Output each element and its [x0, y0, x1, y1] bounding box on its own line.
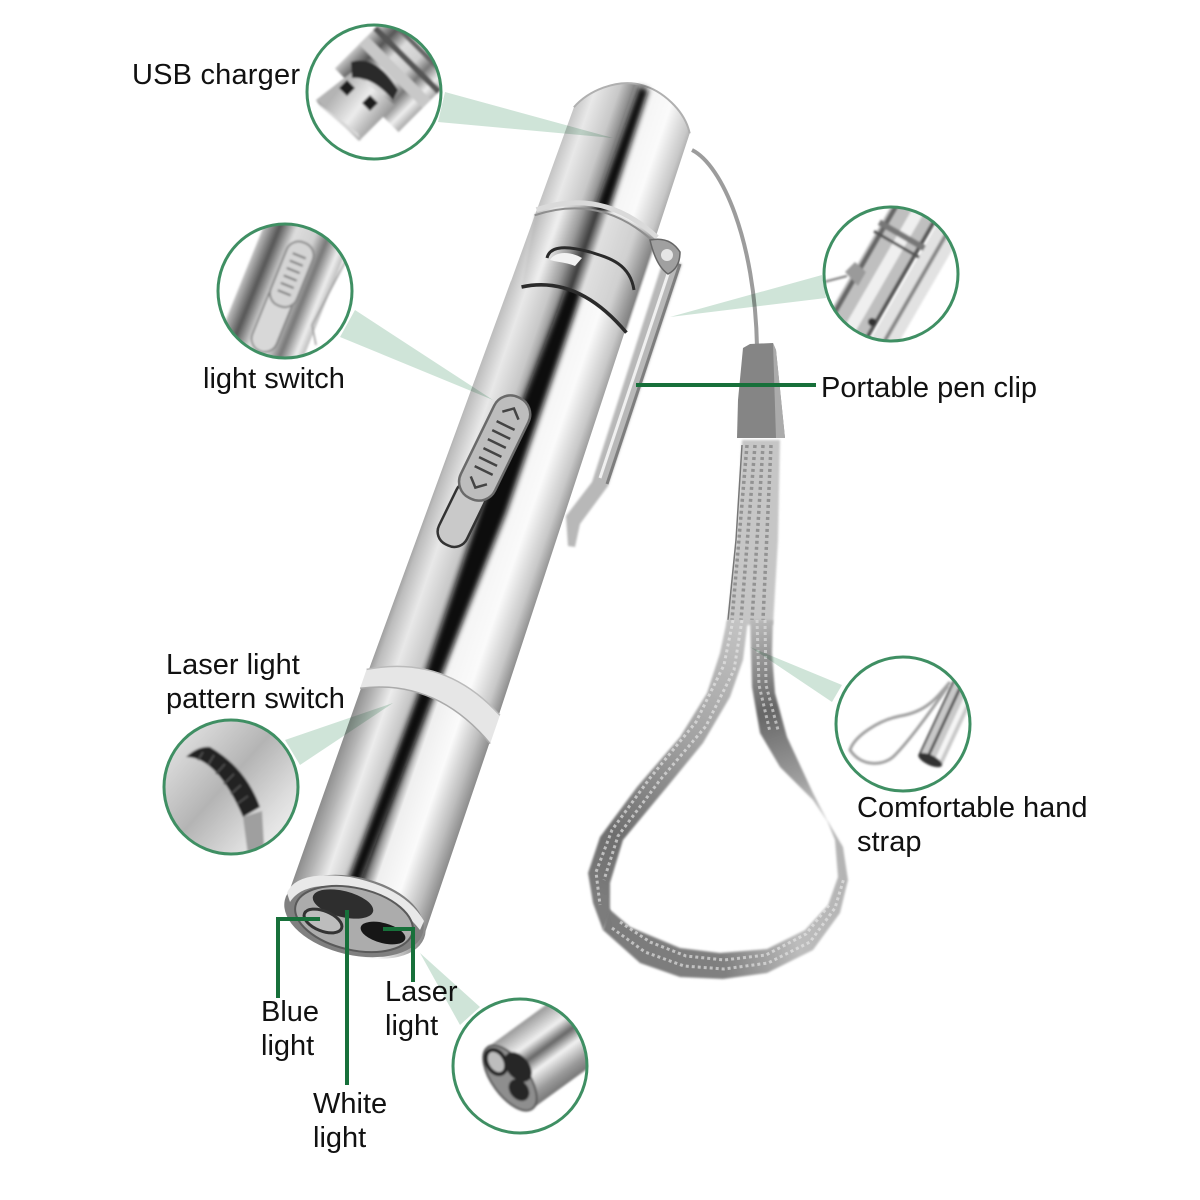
strap right strand	[750, 620, 843, 847]
line: pen clip	[636, 383, 816, 387]
magnified pen	[226, 226, 344, 356]
blue lens	[301, 904, 345, 938]
switch slider	[453, 389, 536, 507]
light switch	[430, 389, 536, 553]
line: laser light	[383, 929, 413, 982]
beam: pattern switch	[285, 703, 393, 765]
label: comfortable hand strap: strap	[857, 826, 921, 858]
magnified clip barrel	[833, 208, 932, 335]
label: USB charger: USB charger	[132, 59, 300, 91]
label: white light: light	[313, 1122, 366, 1154]
strap connector	[737, 343, 785, 438]
beam: lens	[420, 953, 480, 1025]
mini pen	[916, 680, 968, 769]
beam: light switch	[340, 310, 493, 400]
inner face	[289, 875, 419, 963]
magnified clip bar	[872, 226, 952, 340]
strap bottom band	[603, 820, 848, 979]
label: laser light pattern switch: pattern switch	[166, 683, 345, 715]
beam: pen clip	[670, 275, 826, 317]
label: light switch: light switch	[203, 363, 345, 395]
rim	[276, 862, 432, 970]
label: blue light: Blue	[261, 996, 319, 1028]
hand strap and cord	[588, 150, 848, 979]
USB collars	[334, 26, 440, 133]
pattern switch ring	[357, 650, 506, 744]
mini lenses	[482, 1046, 508, 1078]
label: laser light pattern switch: Laser light	[166, 649, 300, 681]
line: blue light	[278, 919, 320, 998]
inset: hand strap	[836, 657, 981, 791]
clip collar	[509, 189, 661, 331]
strap trunk	[727, 440, 780, 625]
USB connector	[316, 72, 395, 141]
label: laser light: light	[385, 1010, 438, 1042]
middle barrel	[365, 279, 634, 724]
inset: light switch	[216, 222, 354, 360]
lower barrel	[276, 669, 501, 976]
green beams	[285, 92, 842, 1025]
pen body	[276, 62, 710, 976]
mini strap loop	[850, 682, 950, 763]
pen clip	[547, 239, 682, 547]
beam: USB charger	[438, 92, 613, 138]
label: laser light: Laser	[385, 976, 458, 1008]
label: comfortable hand strap: Comfortable hand	[857, 792, 1088, 824]
switch slot	[433, 477, 491, 552]
inset: pen clip	[822, 206, 960, 342]
inset: lens	[452, 998, 588, 1134]
callout lines	[278, 385, 816, 1085]
pen end face	[276, 862, 432, 970]
mini barrel	[491, 1005, 586, 1107]
white lens	[310, 884, 376, 924]
cord	[692, 150, 757, 347]
inset: pattern switch	[162, 718, 300, 856]
knurled band	[186, 747, 260, 817]
inset: USB charger	[306, 24, 442, 160]
beam: hand strap	[750, 647, 842, 702]
upper barrel	[508, 65, 702, 331]
laser lens	[358, 917, 408, 949]
specular streak	[348, 81, 652, 891]
line: white light	[345, 910, 349, 1085]
collar slot	[547, 248, 634, 290]
label: portable pen clip: Portable pen clip	[821, 372, 1037, 404]
strap left strand	[588, 620, 748, 930]
label: white light: White	[313, 1088, 387, 1120]
label: blue light: light	[261, 1030, 314, 1062]
